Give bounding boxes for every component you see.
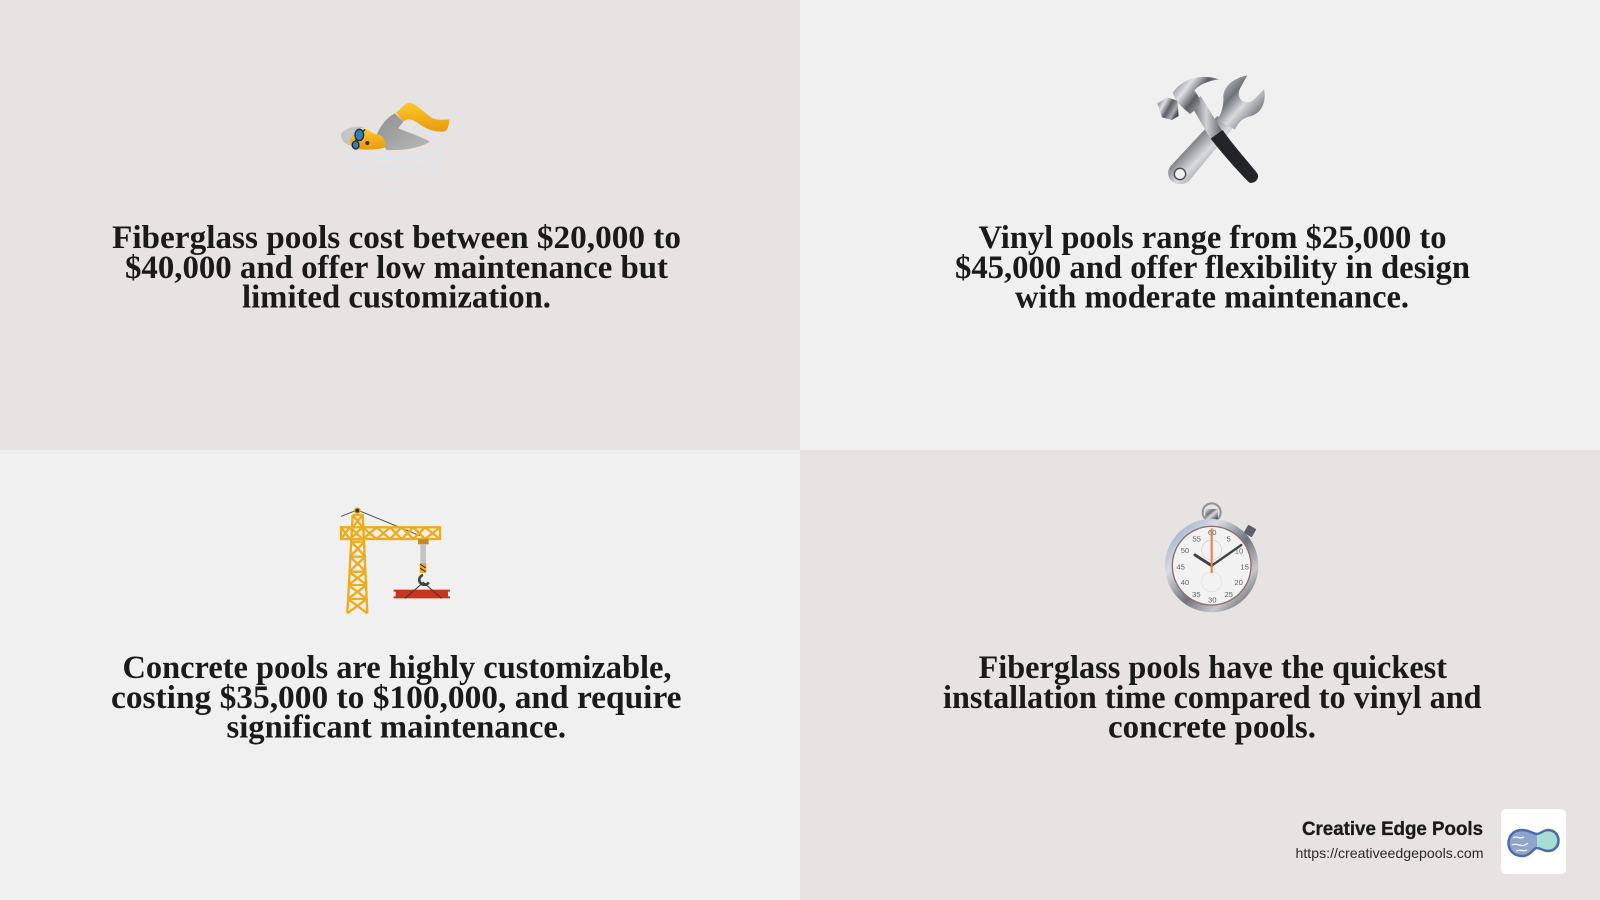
icon: stopwatch: 45 bbox=[1176, 562, 1185, 571]
text: installation time: concrete pools. bbox=[1108, 710, 1316, 746]
icon: stopwatch: 55 bbox=[1192, 535, 1201, 544]
text: concrete cost: significant maintenance. bbox=[226, 710, 566, 746]
icon: stopwatch: 25 bbox=[1224, 590, 1233, 599]
icon: stopwatch: 15 bbox=[1240, 562, 1249, 571]
text: fiberglass cost: Fiberglass pools cost between $20,000 to bbox=[112, 220, 681, 256]
brand name: Creative Edge Pools bbox=[1302, 819, 1483, 840]
panel: vinyl cost bbox=[800, 0, 1600, 450]
icon: stopwatch: 5 bbox=[1227, 535, 1231, 544]
text: installation time: installation time compared to vinyl and bbox=[943, 680, 1482, 716]
text: fiberglass cost: limited customization. bbox=[242, 280, 551, 316]
text: concrete cost bbox=[111, 650, 682, 746]
text: vinyl cost bbox=[955, 220, 1470, 316]
icon: stopwatch: 60 bbox=[1208, 528, 1217, 537]
icon: construction crane bbox=[341, 507, 450, 613]
text: fiberglass cost bbox=[112, 220, 681, 316]
text: vinyl cost: $45,000 and offer flexibility in design bbox=[955, 250, 1470, 286]
icon: hammer and wrench bbox=[1157, 75, 1265, 184]
icon: stopwatch: 35 bbox=[1192, 590, 1201, 599]
icon: stopwatch bbox=[1165, 503, 1258, 612]
text: fiberglass cost: $40,000 and offer low maintenance but bbox=[125, 250, 668, 286]
panel: fiberglass cost bbox=[0, 0, 800, 450]
icon: swimmer bbox=[341, 103, 449, 177]
text: vinyl cost: Vinyl pools range from $25,000 to bbox=[978, 220, 1446, 256]
text: installation time: Fiberglass pools have the quickest bbox=[978, 650, 1447, 686]
panel: installation time bbox=[800, 450, 1600, 900]
brand url: https://creativeedgepools.com bbox=[1296, 845, 1484, 861]
text: concrete cost: costing $35,000 to $100,000, and require bbox=[111, 680, 682, 716]
icon: stopwatch: 50 bbox=[1181, 546, 1189, 555]
icon: stopwatch: 30 bbox=[1208, 595, 1217, 604]
text: installation time bbox=[943, 650, 1482, 746]
icon: stopwatch: 20 bbox=[1234, 578, 1243, 587]
icon: stopwatch: 10 bbox=[1235, 547, 1243, 556]
panel: concrete cost bbox=[0, 450, 800, 900]
logo bbox=[1501, 809, 1566, 874]
text: vinyl cost: with moderate maintenance. bbox=[1015, 280, 1409, 316]
icon: stopwatch: 40 bbox=[1181, 578, 1189, 587]
text: concrete cost: Concrete pools are highly customizable, bbox=[122, 650, 672, 686]
